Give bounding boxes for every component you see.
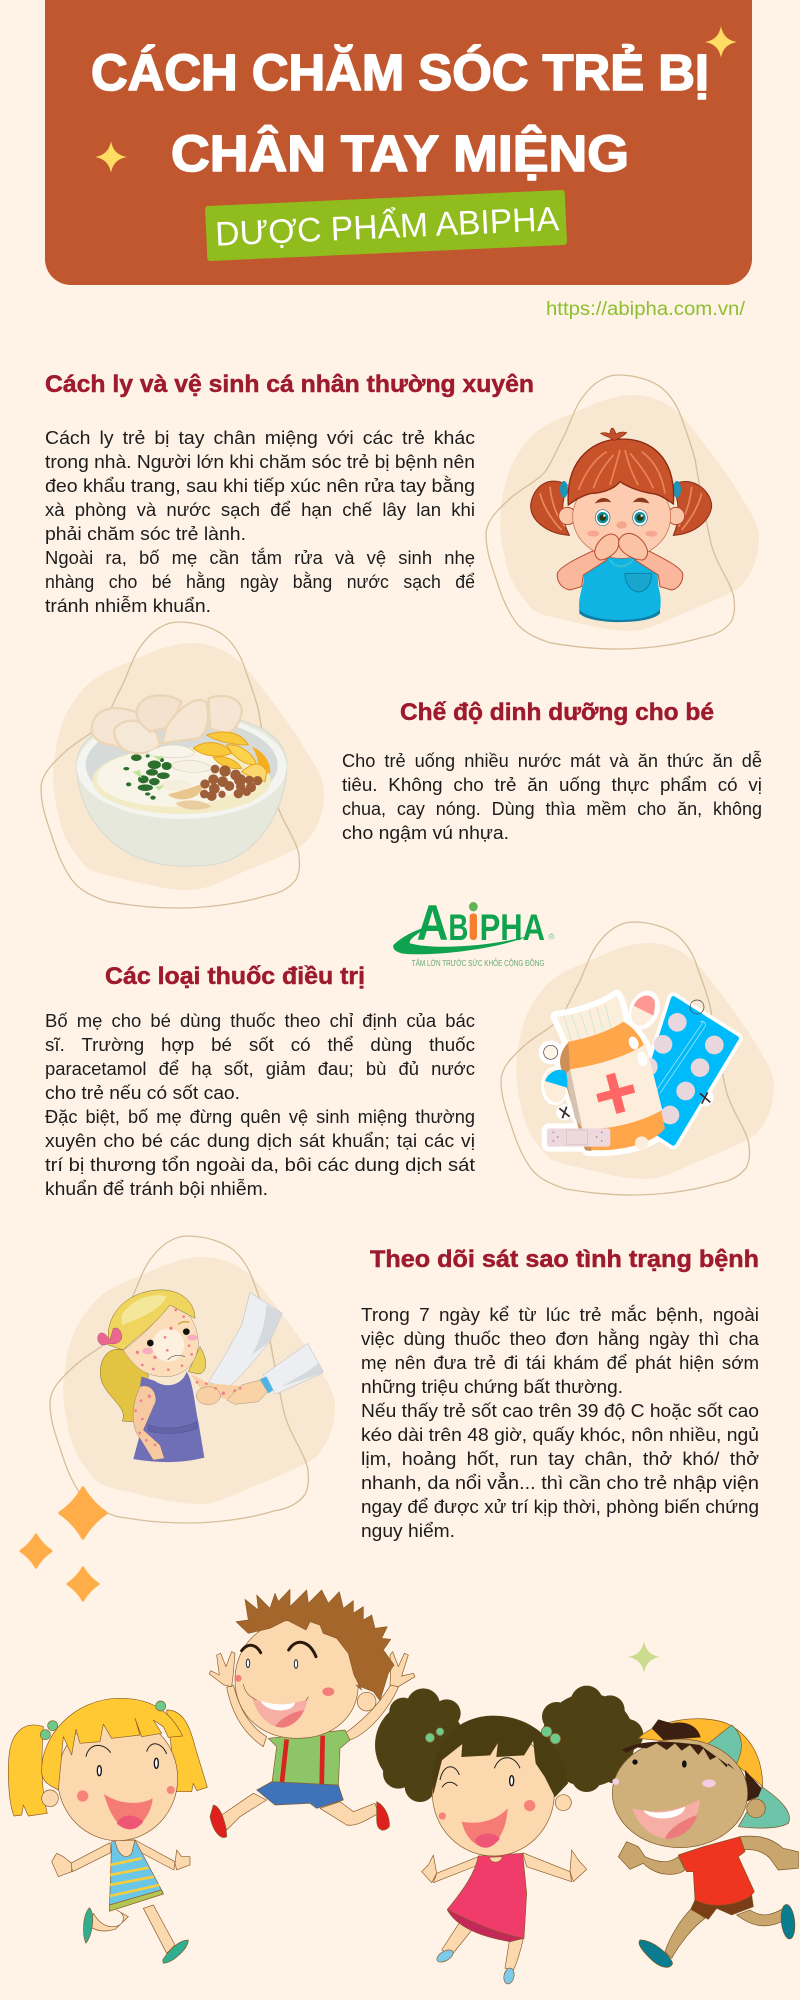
section 2 body text: Cho trẻ uống nhiều nước mát và ăn thức ăn dễ (342, 750, 762, 771)
illustration: bowl of porridge (77, 695, 287, 866)
section 1 body text: Cách ly trẻ bị tay chân miệng với các trẻ khác (45, 427, 475, 448)
section 1 body text: phải chăm sóc trẻ lành. (45, 523, 246, 544)
section 1 body text (45, 427, 475, 616)
logo: Abipha: A (417, 895, 448, 951)
section 1 heading: Cách ly và vệ sinh cá nhân thường xuyên (45, 371, 534, 398)
illustration: girl covering her mouth (531, 428, 712, 622)
illustration: girl with curly buns (375, 1686, 643, 1985)
section 2 body text: chua, cay nóng. Dùng thìa mềm cho ăn, không (342, 798, 762, 819)
outline behind section 2 illustration (41, 622, 299, 908)
icon: pale green star (628, 1641, 660, 1673)
icon: yellow star left (95, 141, 127, 173)
section 3 body text: cho trẻ nếu có sốt cao. (45, 1082, 240, 1103)
section 4 body text (361, 1304, 760, 1541)
section 2 heading: Chế độ dinh dưỡng cho bé (400, 699, 714, 726)
section 3 body text: sĩ. Trường hợp bé sốt có thể dùng thuốc (45, 1034, 475, 1055)
icon: orange stars (20, 1488, 106, 1600)
blob behind section 4 illustration (63, 1257, 335, 1504)
section 3 body text: xuyên cho bé các dung dịch sát khuẩn; tại các vị (45, 1130, 475, 1151)
section 4 heading: Theo dõi sát sao tình trạng bệnh (370, 1246, 759, 1273)
section 1 body text: nhàng cho bé hằng ngày bằng nước sạch để (45, 571, 475, 592)
illustration: running boy with cap (612, 1719, 798, 1967)
section 1 body text: Ngoài ra, bố mẹ cần tắm rửa và vệ sinh nhẹ (45, 547, 475, 568)
section 3 body text: khuẩn để tránh bội nhiễm. (45, 1178, 268, 1199)
blob behind section 3 illustration (516, 943, 774, 1179)
section 4 body text: kéo dài trên 48 giờ, quấy khóc, nôn nhiều, ngủ (361, 1424, 759, 1445)
outline behind section 4 illustration (50, 1236, 308, 1523)
section 3 body text: trí bị thương tổn ngoài da, bôi các dung dịch sát (45, 1154, 475, 1175)
section 4 body text: Trong 7 ngày kể từ lúc trẻ mắc bệnh, ngoài (361, 1304, 759, 1325)
section 4 body text: nhanh, da nổi vẳn... thì cần cho trẻ nhập viện (361, 1472, 759, 1493)
section 1 body text: trong nhà. Người lớn khi chăm sóc trẻ bị bệnh nên (45, 451, 475, 472)
section 4 body text: lịm, hoảng hốt, run tay chân, thở khó/ thở (361, 1448, 759, 1469)
illustration: jumping boy with brown hair (209, 1589, 415, 1837)
section 3 heading: Các loại thuốc điều trị (105, 963, 365, 990)
section 4 body text: nguy hiểm. (361, 1520, 455, 1541)
panel: title header (45, 0, 752, 285)
logo: Abipha: TÂM LỚN TRƯỚC SỨC KHỎE CỘNG ĐỒNG (412, 958, 544, 968)
logo: Abipha: B (448, 906, 468, 948)
illustration: medicine bottle, pills and bandage (539, 986, 737, 1152)
title line 2: CHÂN TAY MIỆNG (171, 124, 629, 182)
logo: Abipha: ® (548, 931, 555, 941)
section 3 body text: paracetamol để hạ sốt, giảm đau; bù đủ nước (45, 1058, 475, 1079)
section 1 body text: xà phòng và nước sạch để hạn chế lây lan khi (45, 499, 475, 520)
blob behind section 2 illustration (53, 643, 324, 890)
section 2 body text: cho ngậm vú nhựa. (342, 822, 509, 843)
outline behind section 1 illustration (486, 375, 734, 649)
section 1 body text: đeo khẩu trang, sau khi tiếp xúc nên rửa tay bằng (45, 475, 475, 496)
section 4 body text: ngay để được xử trí kịp thời, phòng biến chứng (361, 1496, 759, 1517)
subtitle badge: DƯỢC PHẨM ABIPHA (214, 200, 560, 254)
icon: yellow star top right (705, 26, 737, 58)
title line 1: CÁCH CHĂM SÓC TRẺ BỊ (91, 43, 709, 101)
section 4 body text: những triệu chứng bất thường. (361, 1376, 623, 1397)
blob behind section 1 illustration (500, 395, 759, 631)
illustration: girl with yellow pigtails (8, 1698, 207, 1963)
section 4 body text: Nếu thấy trẻ sốt cao trên 39 độ C hoặc sốt cao (361, 1400, 759, 1421)
section 1 body text: tránh nhiễm khuẩn. (45, 595, 211, 616)
section 2 body text (342, 750, 762, 843)
illustration: sick girl with rash and doctor's hands (98, 1290, 324, 1462)
website url: https://abipha.com.vn/ (546, 299, 746, 320)
section 4 body text: việc dùng thuốc theo đơn hằng ngày thì cha (361, 1328, 760, 1349)
section 3 body text (45, 1010, 475, 1199)
section 3 body text: Đặc biệt, bố mẹ đừng quên vệ sinh miệng thường (45, 1106, 475, 1127)
section 3 body text: Bố mẹ cho bé dùng thuốc theo chỉ định của bác (45, 1010, 475, 1031)
outline behind section 3 illustration (501, 922, 749, 1195)
logo: Abipha (393, 895, 555, 968)
section 4 body text: mẹ nên đưa trẻ đi tái khám để phát hiện sớm (361, 1352, 759, 1373)
logo: Abipha: PHA (480, 906, 545, 948)
section 2 body text: tiêu. Không cho trẻ ăn uống thực phẩm có vị (342, 774, 762, 795)
